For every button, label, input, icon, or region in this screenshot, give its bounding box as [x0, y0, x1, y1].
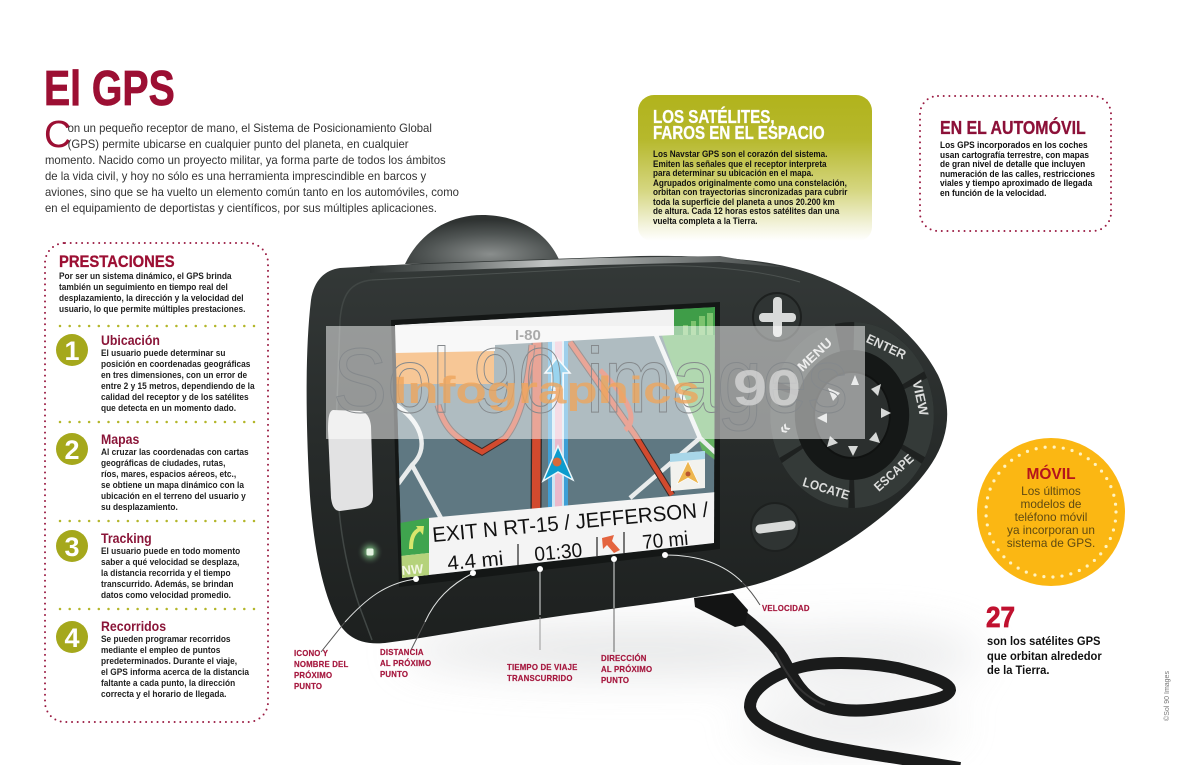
label: dirección: DIRECCIÓN	[601, 653, 647, 663]
panel intro: prestaciones: usuario, lo que permite múltiples prestaciones.	[59, 304, 245, 314]
text: ubicación: que detecta en un momento dado.	[101, 402, 236, 412]
intro text: de la vida civil, y hoy no sólo es una herramienta imprescindible en barcos y	[45, 169, 426, 183]
text: satélites: para determinar su ubicación en el mapa.	[653, 168, 813, 178]
text: satélites: Emiten las señales que el receptor interpreta	[653, 159, 827, 169]
wheel geometry	[756, 306, 948, 524]
wheel button labels: ENTER	[864, 331, 909, 362]
bottom info band	[402, 492, 716, 580]
wheel button labels: VIEW	[909, 379, 932, 418]
front face bevel	[336, 280, 372, 640]
label: distancia: DISTANCIA	[380, 647, 424, 657]
heading: ubicación: Ubicación	[101, 332, 160, 348]
text: mapas: su desplazamiento.	[101, 502, 178, 512]
heading: mapas: Mapas	[101, 431, 139, 447]
heading: satélites: FAROS EN EL ESPACIO	[653, 123, 825, 143]
text: mapas	[101, 446, 249, 512]
text: satélites: orbitan con trayectorias sincronizadas para cubrir	[653, 187, 847, 197]
screen bezel	[391, 302, 720, 587]
text: recorridos: mediante el empleo de puntos	[101, 644, 220, 654]
text: 27	[987, 634, 1102, 677]
silver top rim	[370, 256, 790, 273]
road name: I-80	[515, 327, 541, 344]
badge 4	[56, 621, 88, 653]
label: tiempo	[507, 662, 578, 683]
direction arrow	[602, 535, 620, 553]
intro text	[45, 121, 459, 215]
minus button	[751, 503, 799, 551]
panel border: prestaciones	[45, 243, 268, 722]
turn icon	[400, 518, 429, 556]
label: icono	[294, 648, 348, 691]
map: green zone	[662, 325, 715, 460]
drop cap: C	[44, 114, 71, 156]
next point text: EXIT N RT-15 / JEFFERSON /	[431, 498, 709, 547]
badge 4: 4	[64, 623, 80, 653]
badge 1	[56, 334, 88, 366]
text: tracking	[101, 546, 240, 600]
NW badge	[401, 553, 429, 578]
wheel button labels: LOCATE	[801, 474, 852, 503]
wheel button labels: MENU	[794, 335, 835, 374]
label: tiempo: TIEMPO DE VIAJE	[507, 662, 578, 672]
plus button	[753, 293, 801, 341]
map: orange zone	[395, 351, 494, 384]
badge 2: 2	[64, 435, 80, 465]
text: automóvil: en función de la velocidad.	[940, 188, 1046, 198]
label: distancia: PUNTO	[380, 669, 408, 679]
heading: automóvil: EN EL AUTOMÓVIL	[940, 118, 1086, 138]
panel: satélites	[638, 95, 872, 241]
text: ubicación: posición en coordenadas geográficas	[101, 358, 250, 368]
label: dirección: AL PRÓXIMO	[601, 664, 652, 674]
text: satélites: Agrupados originalmente como una constelación,	[653, 178, 847, 188]
screen map	[395, 307, 716, 580]
panel border: automóvil	[920, 96, 1111, 231]
map: white roads	[396, 335, 716, 520]
callout dots	[413, 552, 668, 582]
white side clip	[328, 410, 373, 511]
text: satélites: Los Navstar GPS son el corazón del sistema.	[653, 149, 827, 159]
label: dirección	[601, 653, 652, 685]
center disc	[814, 372, 890, 458]
info dividers	[518, 532, 624, 566]
text: mapas: ubicación en el terreno del usuario y	[101, 490, 246, 500]
text: automóvil: numeración de las calles, restricciones	[940, 168, 1095, 178]
móvil circle	[977, 438, 1125, 586]
text: móvil	[1007, 484, 1095, 550]
text: tracking: la distancia recorrida y el tiempo	[101, 568, 231, 578]
text: automóvil: viales y tiempo aproximado de llegada	[940, 178, 1092, 188]
title: El GPS	[44, 62, 175, 116]
text: ubicación: El usuario puede determinar su	[101, 348, 225, 358]
panel intro: prestaciones: desplazamiento, la dirección y la velocidad del	[59, 292, 244, 302]
badge 3: 3	[64, 532, 80, 562]
label: distancia: AL PRÓXIMO	[380, 658, 431, 668]
signal bars	[683, 313, 713, 335]
text: recorridos: Se pueden programar recorridos	[101, 634, 231, 644]
text: satélites	[653, 149, 848, 226]
route arrow up	[545, 358, 570, 388]
cable connector	[694, 593, 748, 627]
credit: ©Sol 90 Images	[1164, 671, 1171, 721]
text: ubicación: entre 2 y 15 metros, dependiendo de la	[101, 380, 255, 390]
text: tracking: El usuario puede en todo momento	[101, 546, 240, 556]
position arrow	[543, 446, 573, 481]
text: recorridos	[101, 634, 250, 699]
heading: móvil: MÓVIL	[1026, 466, 1076, 483]
direction triangles	[817, 375, 891, 456]
speed: 70 mi	[641, 528, 689, 554]
NW badge: NW	[401, 561, 425, 578]
map: blue route	[548, 340, 568, 510]
watermark: Infographics	[393, 370, 700, 412]
map: signal block	[674, 307, 715, 335]
wheel button labels: «	[773, 417, 795, 439]
badge 2	[56, 433, 88, 465]
text: automóvil: de gran nivel de detalle que incluyen	[940, 159, 1085, 169]
text: 27: que orbitan alrededor	[987, 648, 1102, 662]
heading: satélites: LOS SATÉLITES,	[653, 107, 775, 127]
text: satélites: vuelta completa a la Tierra.	[653, 216, 758, 226]
number badges	[56, 334, 88, 653]
label: icono: PUNTO	[294, 681, 322, 691]
map: top white bar	[395, 309, 674, 353]
wheel segments	[756, 306, 948, 524]
text: automóvil: Los GPS incorporados en los coches	[940, 140, 1088, 150]
text: móvil: Los últimos	[1021, 484, 1081, 498]
badge 3	[56, 530, 88, 562]
GPS body	[307, 256, 947, 643]
text: tracking: datos como velocidad promedio.	[101, 590, 231, 600]
wheel button labels	[773, 331, 932, 503]
cable	[694, 593, 960, 765]
section separators	[60, 326, 258, 609]
label: distancia	[380, 647, 431, 679]
number: 27: 27	[986, 602, 1015, 634]
panel intro: prestaciones	[59, 270, 245, 314]
intro text: aviones, sino que se ha vuelto un elemento común tanto en los automóviles, como	[45, 185, 459, 199]
text: automóvil: usan cartografía terrestre, con mapas	[940, 150, 1089, 160]
intro text: on un pequeño receptor de mano, el Sistema de Posicionamiento Global	[68, 121, 432, 135]
text: recorridos: predeterminados. Durante el viaje,	[101, 656, 237, 666]
text: recorridos: el GPS informa acerca de la distancia	[101, 666, 249, 676]
text: automóvil	[940, 140, 1095, 198]
text: ubicación: en tres dimensiones, con un error de	[101, 370, 247, 380]
heading: satélites	[653, 106, 825, 143]
text: ubicación: calidad del receptor y de los satélites	[101, 392, 249, 402]
device shadow on the ground	[400, 626, 980, 745]
text: 27: son los satélites GPS	[987, 634, 1101, 648]
text: tracking: saber a qué velocidad se desplaza,	[101, 556, 239, 566]
mini map inset	[670, 451, 705, 491]
intro text: (GPS) permite ubicarse en cualquier punto del planeta, en cualquier	[68, 137, 409, 151]
label: tiempo: TRANSCURRIDO	[507, 673, 573, 683]
distance: 4.4 mi	[446, 548, 504, 575]
watermark: Sol 90 images	[333, 330, 848, 432]
heading: tracking: Tracking	[101, 530, 152, 546]
text: recorridos: faltante a cada punto, la dirección	[101, 678, 235, 688]
map: red roads	[438, 340, 672, 510]
label: velocidad: VELOCIDAD	[762, 603, 810, 613]
label: dirección: PUNTO	[601, 675, 629, 685]
text: satélites: de altura. Cada 12 horas estos satélites dan una	[653, 206, 839, 216]
label: icono: ICONO Y	[294, 648, 328, 658]
text: satélites: toda la superficie del planeta a unos 20.200 km	[653, 197, 835, 207]
text: recorridos: correcta y el horario de llegada.	[101, 688, 226, 698]
text: móvil: ya incorporan un	[1007, 523, 1095, 537]
text: mapas: Al cruzar las coordenadas con cartas	[101, 446, 249, 456]
text: mapas: geográficas de ciudades, rutas,	[101, 458, 225, 468]
text: móvil: modelos de	[1020, 497, 1082, 511]
text: móvil: teléfono móvil	[1015, 510, 1087, 524]
label: icono: NOMBRE DEL	[294, 659, 348, 669]
status LED	[357, 539, 383, 565]
text: 27: de la Tierra.	[987, 663, 1049, 677]
text: mapas: se obtiene un mapa dinámico con la	[101, 480, 244, 490]
wheel button labels: ESCAPE	[871, 451, 917, 494]
control wheel	[756, 306, 948, 524]
heading: recorridos: Recorridos	[101, 618, 166, 634]
text: mapas: ríos, mares, espacios aéreos, etc.,	[101, 468, 236, 478]
panel intro: prestaciones: Por ser un sistema dinámico, el GPS brinda	[59, 270, 232, 280]
text: ubicación	[101, 348, 255, 413]
intro text: momento. Nacido como un proyecto militar, ya forma parte de todos los ámbitos	[45, 153, 446, 167]
intro text: en el equipamiento de deportistas y científicos, por sus múltiples aplicaciones.	[45, 201, 437, 215]
elapsed time: 01:30	[533, 540, 583, 566]
label: icono: PRÓXIMO	[294, 670, 332, 680]
panel heading: prestaciones: PRESTACIONES	[59, 252, 175, 271]
watermark: 90	[733, 360, 801, 416]
device illustration	[44, 95, 1125, 765]
GPS antenna dome	[405, 215, 560, 264]
text: móvil: sistema de GPS.	[1007, 536, 1095, 550]
panel intro: prestaciones: también un seguimiento en tiempo real del	[59, 282, 228, 292]
text: tracking: transcurrido. Además, se brindan	[101, 578, 233, 588]
callout leader lines	[321, 555, 760, 652]
badge 1: 1	[64, 336, 80, 366]
